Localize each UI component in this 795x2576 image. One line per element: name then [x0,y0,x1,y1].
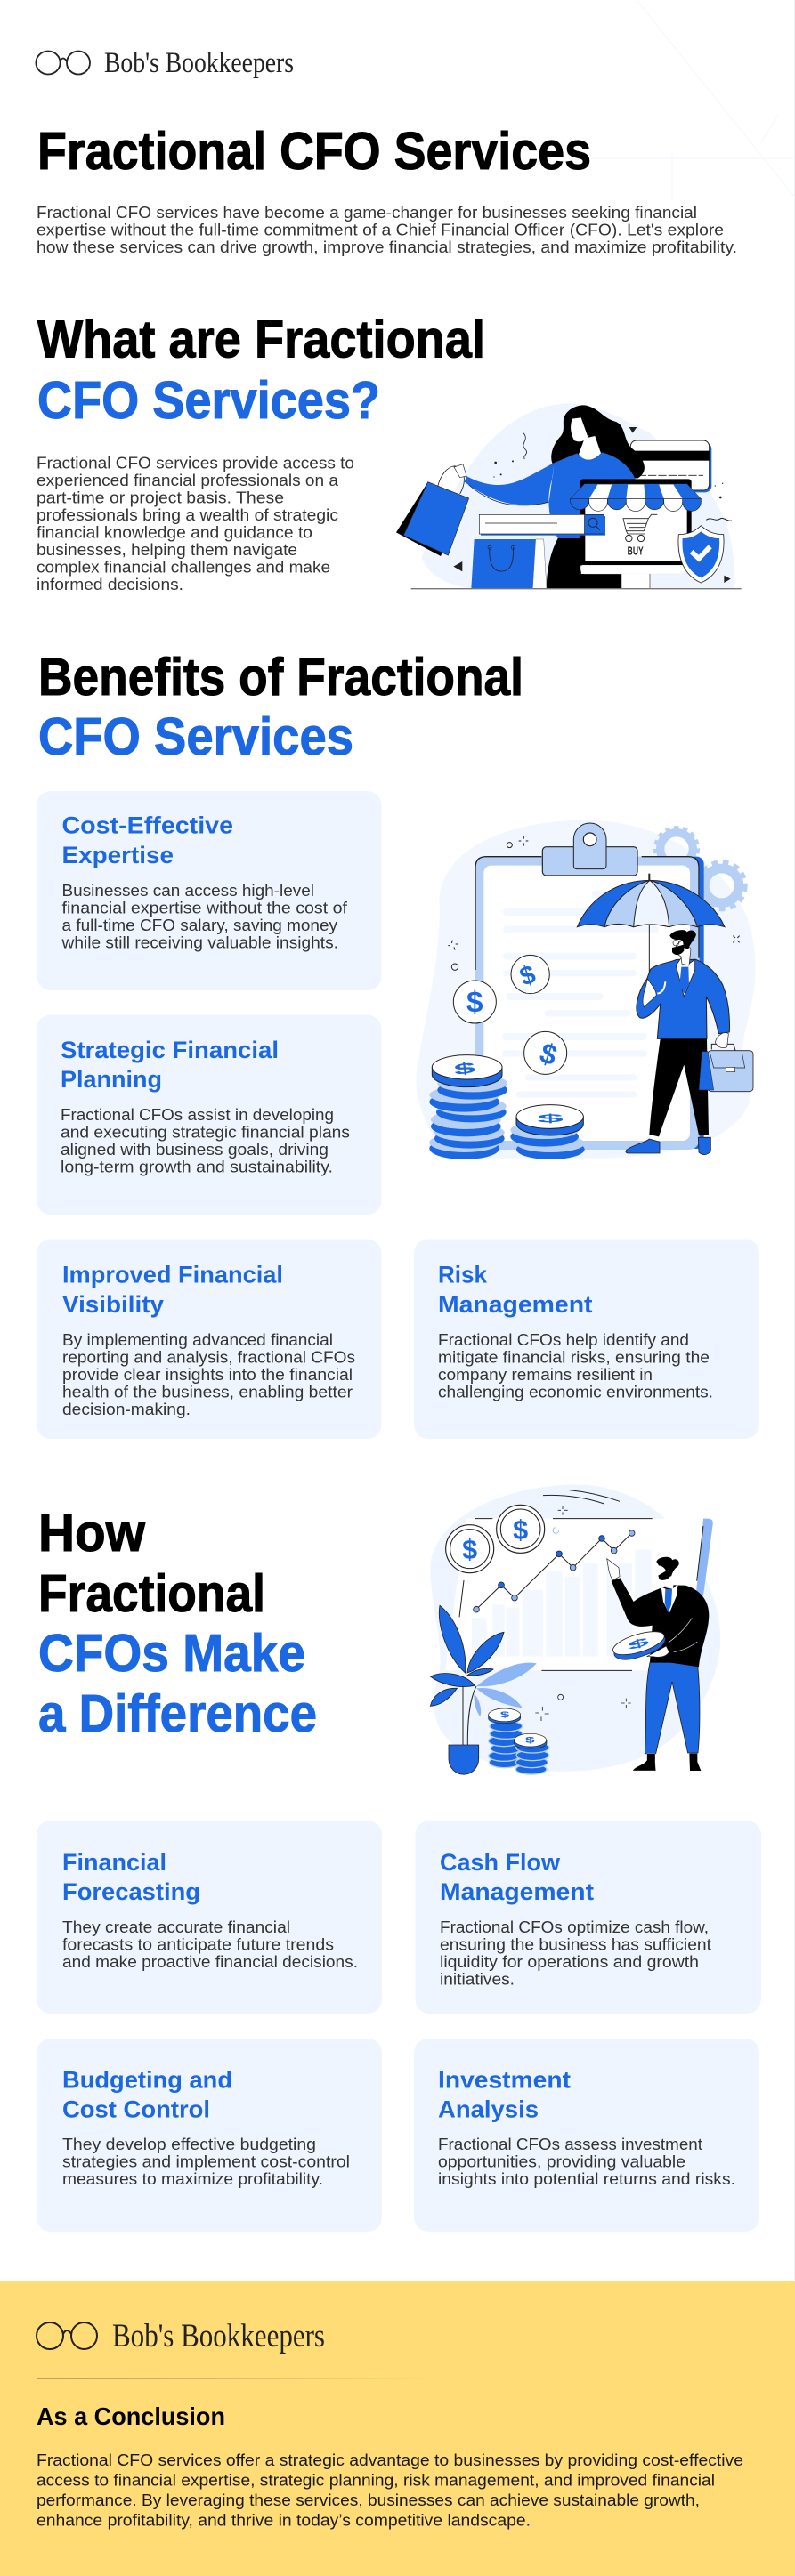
body text: They create accurate financial [62,1918,290,1936]
floating dollar coins: $ [466,987,483,1020]
gears [655,828,745,909]
heading: Benefits of Fractional CFO Services: Benefits of Fractional [38,648,523,707]
heading: How Fractional CFOs Make a Difference [38,1504,317,1743]
text block: what are fractional CFO services: Fractional CFO services provide access to [37,454,354,472]
conclusion heading: As a Conclusion [37,2402,225,2430]
heading: Planning [61,1066,162,1093]
body text [438,1330,713,1401]
conclusion text: access to financial expertise, strategic planning, risk management, and improved financial [37,2470,715,2490]
body text: liquidity for operations and growth [440,1952,699,1971]
storefront monitor [571,479,701,589]
body text: reporting and analysis, fractional CFOs [62,1347,355,1367]
text block: what are fractional CFO services: part-time or project basis. These [37,488,284,507]
floating dollar coins: $ [516,959,539,992]
panel: Improved Financial Visibility [37,1239,381,1439]
panel: Investment Analysis [414,2039,759,2232]
heading: Analysis [438,2096,539,2123]
body text: a full-time CFO salary, saving money [62,916,338,934]
card [630,440,711,492]
intro text block: how these services can drive growth, improve financial strategies, and maximize profitability. [37,238,737,256]
text block: what are fractional CFO services: experienced financial professionals on a [37,471,339,489]
heading: How Fractional CFOs Make a Difference: CFOs Make [38,1624,305,1683]
heading: How Fractional CFOs Make a Difference: Fractional [38,1564,265,1623]
body text: while still receiving valuable insights. [61,933,338,952]
heading: Cash Flow [440,1849,560,1876]
heading: How Fractional CFOs Make a Difference: How [38,1504,145,1563]
heading [438,1262,593,1318]
heading: Cost Control [62,2096,210,2123]
heading: What are Fractional CFO Services?: What are Fractional [37,310,485,368]
heading: Benefits of Fractional CFO Services [38,648,523,766]
intro text block [37,203,737,256]
body text: initiatives. [440,1970,515,1988]
body text: strategies and implement cost-control [62,2152,350,2171]
heading: Improved Financial [62,1262,283,1288]
heading: Forecasting [62,1878,200,1905]
floating dollar coins [453,955,567,1074]
body text: ensuring the business has sufficient [440,1934,711,1954]
floating dollar coins: $ [536,1037,561,1071]
body text: Fractional CFOs optimize cash flow, [440,1918,709,1936]
body text [61,881,348,952]
title: Fractional CFO Services [37,122,591,181]
blue bag [471,539,547,589]
text block: what are fractional CFO services: financial knowledge and guidance to [37,523,312,541]
panel: Risk Management [414,1239,759,1439]
text block: what are fractional CFO services: complex financial challenges and make [37,557,330,577]
text block: what are fractional CFO services: businesses, helping them navigate [37,540,297,559]
body text [62,1330,355,1418]
body text: decision-making. [62,1400,191,1418]
dollar coins: $ [462,1535,477,1565]
body text [62,1918,358,1971]
illustration: woman shopping online [396,403,742,589]
coin stacks [489,1708,549,1774]
coin stacks: $ [525,1736,536,1745]
body text: opportunities, providing valuable [438,2152,685,2171]
heading: Visibility [62,1291,164,1318]
heading [62,1849,200,1905]
body text: and make proactive financial decisions. [62,1952,358,1971]
body text [438,2135,735,2188]
shopping bag [396,464,469,556]
body text [62,2135,350,2188]
shield [678,526,724,583]
heading: How Fractional CFOs Make a Difference: a Difference [38,1684,317,1743]
panel: Strategic Financial Planning [37,1014,381,1215]
body text: forecasts to anticipate future trends [62,1934,334,1954]
logo: Bob's Bookkeepers [36,47,294,79]
coin stack large: $ [453,1058,476,1078]
body text: insights into potential returns and risks. [438,2169,735,2188]
body text [440,1918,711,1988]
illustration: advisor with umbrella, clipboard and coins [416,820,755,1159]
body text: provide clear insights into the financial [62,1365,353,1384]
search bar [479,514,605,536]
illustration: CFO presenting growth chart [430,1484,720,1774]
intro text block: expertise without the full-time commitment of a Chief Financial Officer (CFO). Let's explore [37,221,724,238]
heading [61,1037,279,1093]
text block: what are fractional CFO services [37,454,354,594]
body text: Fractional CFOs help identify and [438,1330,689,1349]
man with coin [607,1557,709,1771]
body text: Businesses can access high-level [62,881,314,900]
heading: Investment [438,2066,571,2093]
man with coin: $ [627,1635,650,1652]
body text: They develop effective budgeting [62,2135,316,2153]
body text: aligned with business goals, driving [61,1140,329,1159]
dollar coins [446,1505,545,1573]
sparkles [535,1506,631,1721]
conclusion text: performance. By leveraging these services, businesses can achieve sustainable growth, [37,2491,700,2509]
conclusion text [37,2451,743,2529]
body text: financial expertise without the cost of [62,899,348,917]
heading: Risk [438,1262,487,1288]
decorative marks [453,427,732,583]
body text [61,1105,350,1176]
umbrella [577,874,725,988]
body text: measures to maximize profitability. [62,2169,323,2188]
logo: Bob's Bookkeepers footer: Bob's Bookkeepers [112,2318,325,2354]
body text: and executing strategic financial plans [61,1123,350,1141]
heading [438,2066,571,2123]
coin stack small [510,1105,585,1159]
logo: Bob's Bookkeepers footer [37,2318,325,2354]
coin stack small: $ [537,1111,564,1126]
text block: what are fractional CFO services: informed decisions. [37,575,183,594]
coin stack large [429,1055,507,1159]
heading [62,1262,283,1318]
panel: Financial Forecasting [37,1821,382,2014]
clipboard [475,823,704,1150]
icon: glasses [36,52,90,75]
heading [62,2066,232,2123]
heading: Management [440,1878,594,1905]
body text: company remains resilient in [438,1365,653,1384]
heading: Budgeting and [62,2066,232,2093]
heading: What are Fractional CFO Services? [37,310,485,430]
text block: what are fractional CFO services: professionals bring a wealth of strategic [37,505,338,524]
conclusion text: enhance profitability, and thrive in today’s competitive landscape. [37,2511,531,2529]
logo: Bob's Bookkeepers: Bob's Bookkeepers [104,47,294,79]
heading: Cost-Effective [62,812,233,838]
heading: Strategic Financial [61,1037,279,1063]
man with briefcase [626,930,753,1155]
line chart [474,1530,635,1612]
conclusion text: Fractional CFO services offer a strategic advantage to businesses by providing cost-effective [37,2451,743,2469]
panel: conclusion [0,2281,795,2576]
body text: Fractional CFOs assess investment [438,2135,702,2153]
woman [465,405,645,589]
heading: What are Fractional CFO Services?: CFO Services? [37,371,380,430]
heading [440,1849,594,1905]
body text: health of the business, enabling better [62,1383,353,1401]
intro text block: Fractional CFO services have become a game-changer for businesses seeking financial [37,203,697,222]
dollar coins: $ [513,1514,528,1545]
coin stacks: $ [500,1711,510,1719]
panel: Cost-Effective Expertise [37,791,381,990]
body text: mitigate financial risks, ensuring the [438,1347,710,1367]
sparkles [448,836,740,970]
body text: By implementing advanced financial [62,1330,333,1349]
heading [62,812,233,868]
body text: long-term growth and sustainability. [61,1157,333,1176]
body text: Fractional CFOs assist in developing [61,1105,334,1124]
storefront monitor: BUY [628,545,644,557]
heading: Financial [62,1849,166,1876]
panel: Budgeting and Cost Control [37,2039,382,2232]
panel: Cash Flow Management [415,1821,761,2014]
heading: Expertise [62,842,174,868]
heading: Benefits of Fractional CFO Services: CFO Services [38,707,353,766]
heading: Management [438,1291,593,1318]
presentation board [445,1490,713,1670]
body text: challenging economic environments. [438,1383,713,1401]
plant [430,1605,537,1774]
